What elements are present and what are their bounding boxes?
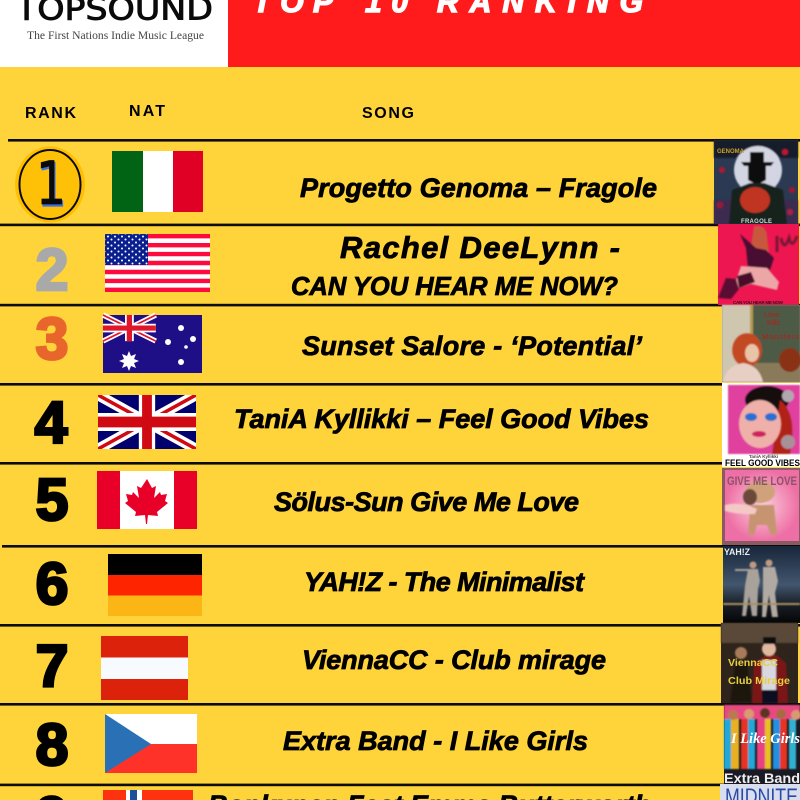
table header labels: SONG xyxy=(362,105,414,122)
rank 1 badge: 1 xyxy=(37,151,67,221)
flag: Canada xyxy=(97,471,197,529)
song titles: TaniA Kyllikki – Feel Good Vibes xyxy=(234,404,649,434)
album cover 3: Potential: Love xyxy=(764,312,779,319)
album cover 4: Feel Good Vibes xyxy=(722,383,800,468)
logo tagline: The First Nations Indie Music League xyxy=(27,28,204,42)
song titles xyxy=(208,173,657,800)
song titles: CAN YOU HEAR ME NOW? xyxy=(291,273,618,301)
album cover 7: Club Mirage: ViennaCC xyxy=(728,658,778,669)
flag: USA xyxy=(105,234,210,292)
table header labels: NAT xyxy=(129,103,165,120)
flag: Italy xyxy=(112,151,203,212)
album cover 8: I Like Girls: Extra Band xyxy=(724,770,800,786)
flag: Australia xyxy=(103,315,202,373)
song titles: Rachel DeeLynn - xyxy=(340,230,620,265)
album cover 5: Give Me Love xyxy=(722,468,800,545)
album cover 7: Club Mirage: Club Mirage xyxy=(728,676,790,687)
song titles: YAH!Z - The Minimalist xyxy=(304,567,585,597)
flag: Germany xyxy=(108,554,202,616)
album cover 3: Potential: Monsters xyxy=(762,332,799,341)
album cover 4: Feel Good Vibes: TaniA Kyllikki xyxy=(749,454,778,459)
song titles: Sunset Salore - ‘Potential’ xyxy=(302,331,642,361)
song titles: Sölus-Sun Give Me Love xyxy=(274,487,579,517)
album cover 7: Club Mirage xyxy=(721,623,798,703)
album cover 1: Fragole xyxy=(714,140,798,225)
panel: logo header xyxy=(0,0,228,67)
rank numbers: 6 xyxy=(36,551,68,617)
flag: Austria xyxy=(101,636,188,700)
album cover 2: Can You Hear Me Now xyxy=(718,224,799,305)
rank numbers: 7 xyxy=(36,633,68,699)
album cover 6: The Minimalist: YAH!Z xyxy=(724,547,750,557)
rank numbers: 8 xyxy=(36,712,68,778)
album cover 6: The Minimalist xyxy=(723,546,800,623)
table header labels: RANK xyxy=(25,105,76,122)
rank 1 badge: 1 xyxy=(36,149,66,219)
album cover 2: Can You Hear Me Now: CAN YOU HEAR ME NOW xyxy=(733,300,784,305)
rank numbers: 3 xyxy=(36,306,68,372)
table header labels xyxy=(25,103,414,122)
rank numbers: 4 xyxy=(35,390,68,456)
album cover 8: I Like Girls xyxy=(724,705,800,786)
flag: Czech Republic xyxy=(105,714,197,773)
song titles: ViennaCC - Club mirage xyxy=(302,645,606,675)
panel: title banner xyxy=(228,0,800,67)
album cover 3: Potential xyxy=(722,305,800,382)
album cover 1: Fragole: FRAGOLE xyxy=(741,219,772,225)
song titles: Extra Band - I Like Girls xyxy=(283,726,588,756)
rank numbers xyxy=(35,237,68,800)
title xyxy=(253,0,643,19)
song titles: Progetto Genoma – Fragole xyxy=(300,173,657,203)
flag: Norway xyxy=(103,790,193,800)
flag: United Kingdom xyxy=(98,395,196,449)
rank 1 badge xyxy=(15,146,85,222)
album cover 1: Fragole: GENOMA xyxy=(717,149,745,155)
album cover 3: Potential: Kills xyxy=(767,320,780,327)
rank numbers: 2 xyxy=(36,237,68,303)
rank numbers: 5 xyxy=(36,467,68,533)
